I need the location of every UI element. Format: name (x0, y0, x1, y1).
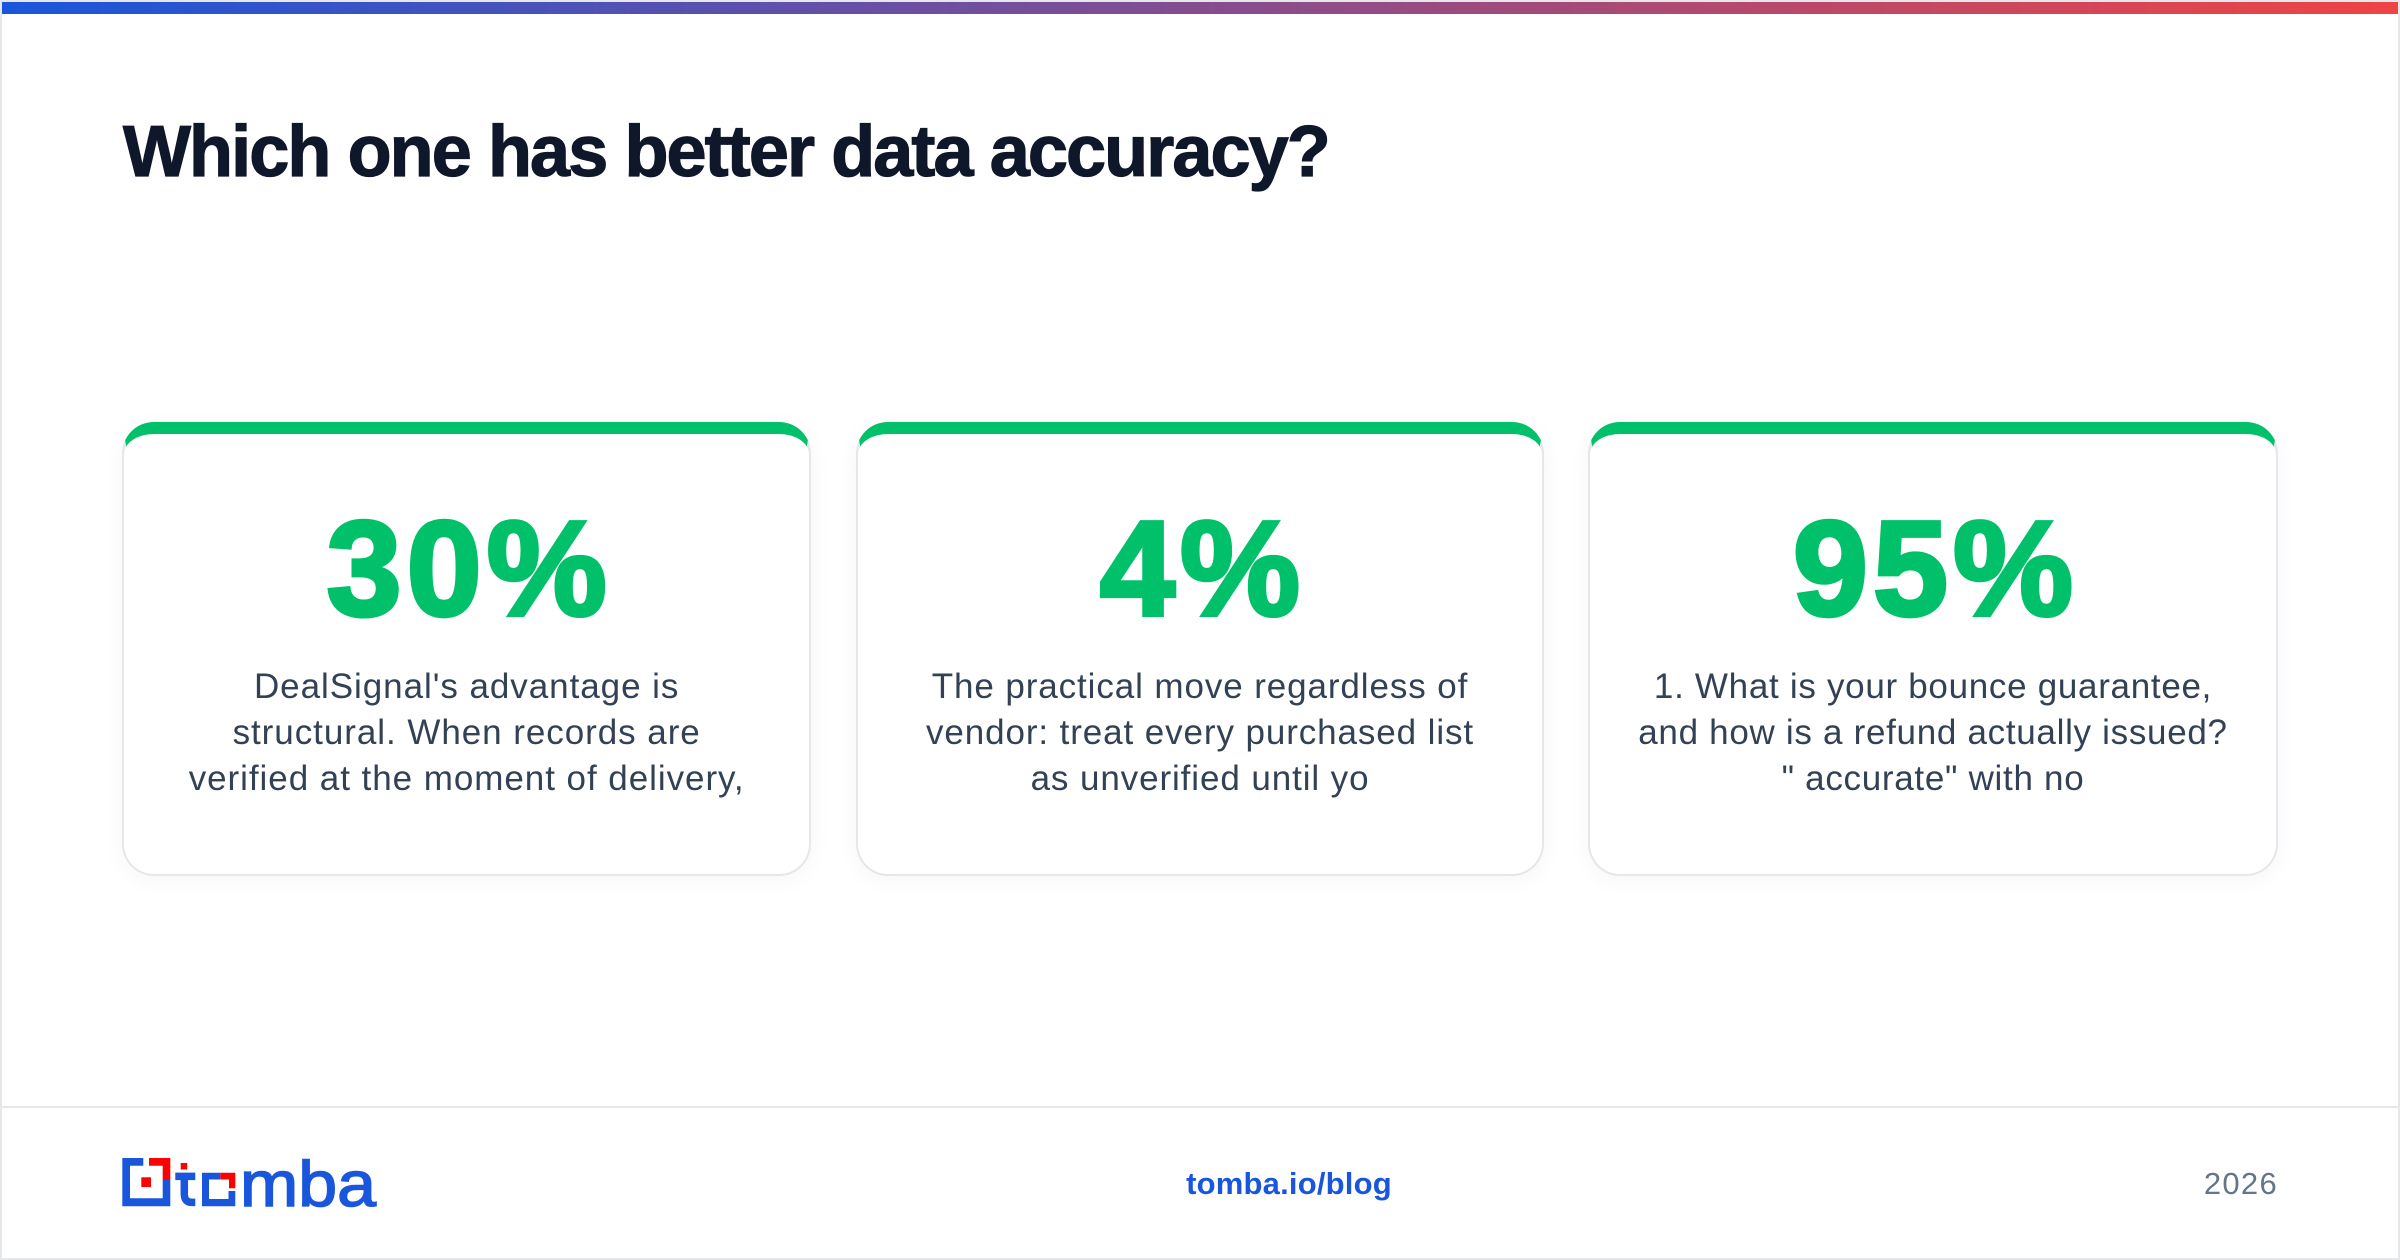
description: practical move (926, 667, 1474, 798)
description: DealSignal: DealSignal's advantage is (254, 667, 679, 706)
icon: logo mark (122, 1158, 170, 1206)
top gradient bar (2, 2, 2398, 14)
description: practical move: as unverified until yo (1031, 759, 1369, 798)
logo letter t and o (175, 1163, 235, 1206)
description: bounce guarantee: 1. What is your bounce guarantee, (1654, 667, 2212, 706)
card: 95% (1588, 422, 2278, 876)
footer link: tomba.io/blog (1186, 1166, 1392, 1201)
description: DealSignal: verified at the moment of delivery, (189, 759, 745, 798)
stat: 95%: 95% (1793, 493, 2078, 644)
description: DealSignal (188, 667, 745, 798)
stat: 30%: 30% (327, 493, 612, 644)
description: bounce guarantee: and how is a refund actually issued? (1638, 713, 2228, 752)
description: practical move: vendor: treat every purchased list (926, 713, 1474, 752)
stat: 4%: 4% (1100, 493, 1305, 644)
card: 30% (122, 422, 811, 876)
description: bounce guarantee: " accurate" with no (1782, 759, 2084, 798)
footer divider (2, 1106, 2398, 1108)
title: Which one has better data accuracy? (123, 112, 1329, 192)
card: 4% (856, 422, 1544, 876)
description: bounce guarantee (1638, 667, 2228, 798)
description: DealSignal: structural. When records are (233, 713, 701, 752)
logo: tomba (122, 1150, 377, 1214)
description: practical move: The practical move regardless of (932, 667, 1468, 706)
footer year: 2026 (2204, 1166, 2278, 1201)
